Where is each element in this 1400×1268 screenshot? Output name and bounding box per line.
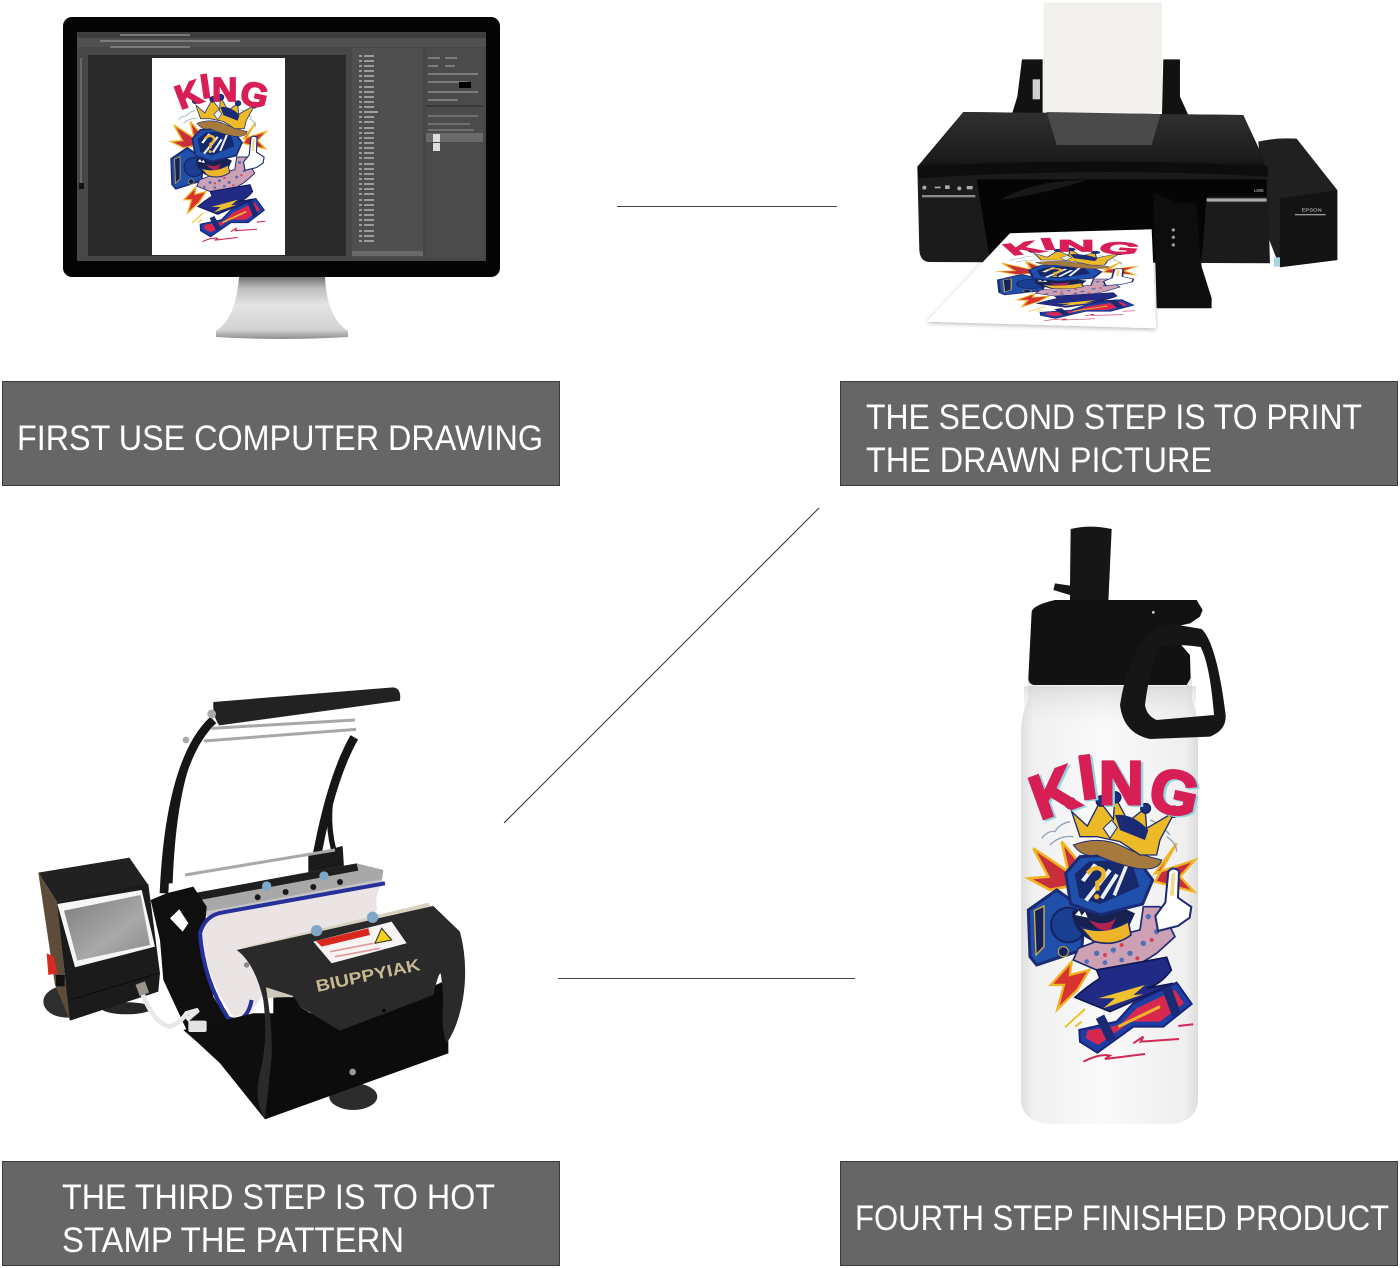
chrome hinge plate [193,863,383,917]
output tray [1153,193,1212,308]
printed artwork [1021,742,1207,1062]
ink tank: EPSON [1302,208,1322,214]
printed transfer sheet: KING [997,235,1145,259]
power switch [47,953,57,975]
caption: step 1 [2,382,560,486]
monitor stand [216,277,348,339]
step 2 illustration: printer with printed transfer sheet [917,3,1337,328]
caption: step 3: THE THIRD STEP IS TO HOT [62,1178,495,1217]
step 3 illustration: mug heat press [38,687,465,1119]
caption: step 3: STAMP THE PATTERN [62,1221,404,1260]
connector line: step 1 to step 2 [617,206,837,208]
caption: step 2: THE DRAWN PICTURE [866,441,1212,480]
paper guides [1012,59,1188,115]
photo editor screen [77,32,486,261]
printer body [917,112,1270,263]
KING lettering: KING [1021,742,1205,833]
step 1 illustration: computer monitor [63,17,500,339]
suction feet [43,986,90,1018]
top handle [213,687,400,725]
front cradle [183,871,465,1119]
carrying handle [1120,623,1226,739]
bottle body [1021,680,1198,1124]
monitor bezel [63,17,500,277]
heating mat [200,882,385,1017]
caption: step 2 [840,382,1398,486]
hinge bracket [151,887,230,1033]
press arms [164,720,354,893]
connector line: step 2 to step 3 [504,508,819,823]
clamp bolts [262,871,378,936]
blank sheet in rear feeder [1043,3,1162,113]
caption: step 4 [840,1162,1398,1266]
caption: step 2: THE SECOND STEP IS TO PRINT [866,398,1362,437]
caption: step 1: FIRST USE COMPUTER DRAWING [17,419,543,458]
ink tank [1258,138,1337,267]
artwork canvas [152,58,285,255]
bottle lid and spout [1028,527,1226,739]
caption: step 3 [2,1162,560,1266]
warning label [313,922,407,963]
connector line: step 3 to step 4 [558,978,855,980]
artwork canvas: KING [170,68,272,117]
chrome bars [185,720,356,875]
KING lettering: KING [1024,744,1207,834]
control box [38,858,160,1021]
printed transfer sheet [927,229,1156,328]
step 4 illustration: finished printed water bottle [1021,527,1226,1124]
printer body: L805 [1254,188,1264,193]
heater cable [142,992,198,1027]
mirrored brand lettering: BIUPPYIAK [314,955,422,996]
